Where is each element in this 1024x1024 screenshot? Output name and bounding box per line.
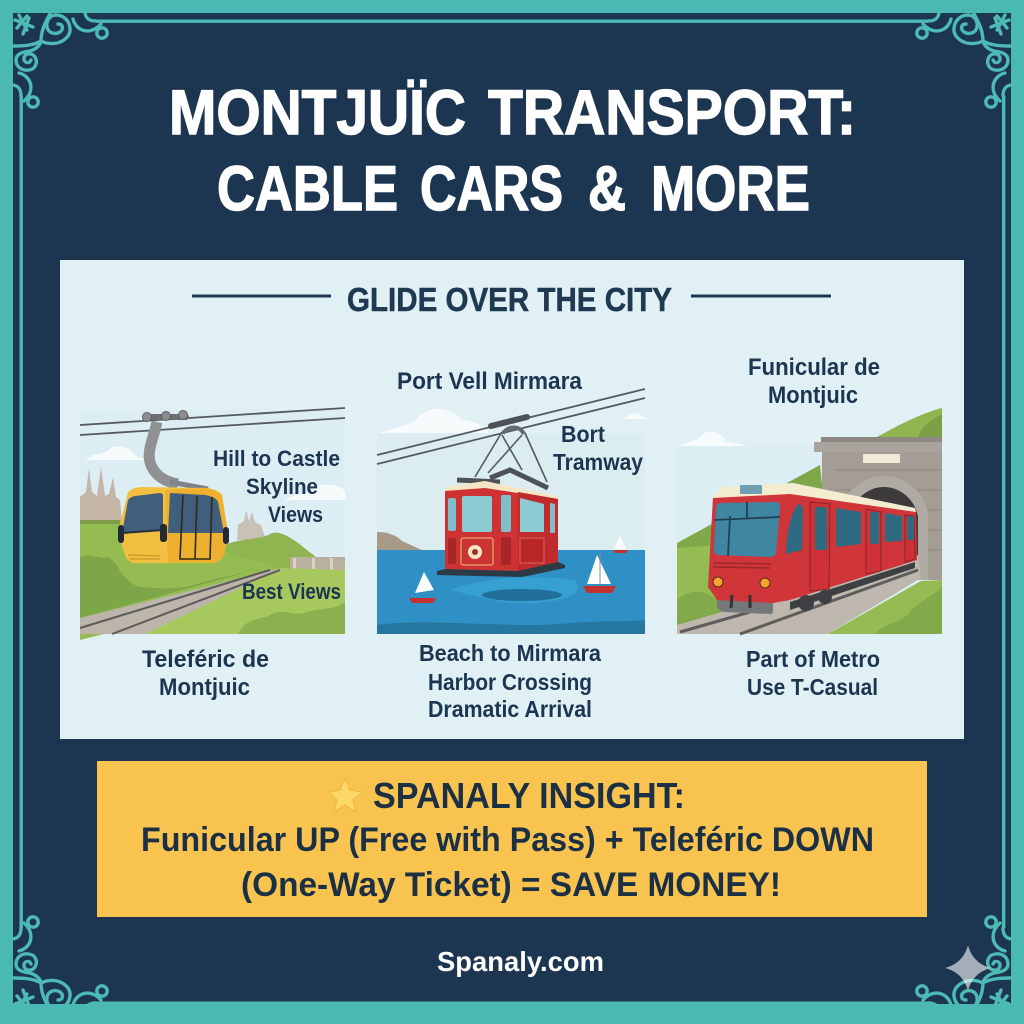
caption: Part of Metro: Use T-Casual <box>747 674 878 700</box>
caption: Teleféric de Montjuic <box>142 646 269 701</box>
image labels <box>213 446 341 604</box>
caption: Beach to Mirmara: Harbor Crossing <box>428 669 592 695</box>
image labels <box>553 421 643 475</box>
icon: star <box>329 778 362 812</box>
callout text: (One-Way Ticket) = SAVE MONEY! <box>241 866 781 904</box>
image labels: Skyline <box>246 474 318 499</box>
image labels: Tramway <box>553 449 643 475</box>
caption: Beach to Mirmara <box>419 640 601 722</box>
caption: Teleféric de Montjuic: Montjuic <box>159 674 250 701</box>
title: CABLE <box>217 154 398 224</box>
title: MORE <box>651 154 810 224</box>
caption: Beach to Mirmara: Dramatic Arrival <box>428 696 592 722</box>
footer: website: Spanaly.com <box>437 946 604 977</box>
image labels: Views <box>268 502 323 527</box>
caption: Funicular de Montjuic <box>748 354 880 409</box>
caption: Part of Metro: Part of Metro <box>746 646 880 672</box>
panel: glide over the city <box>60 260 964 739</box>
callout: Spanaly insight <box>97 761 927 917</box>
caption: Port Vell Mirmara: Port Vell Mirmara <box>397 368 583 395</box>
panel heading <box>192 281 831 318</box>
image labels: Best Views <box>242 579 341 604</box>
title: & <box>588 154 626 224</box>
callout text: SPANALY INSIGHT: <box>373 775 685 816</box>
illustration: red tramway over harbor <box>377 389 646 634</box>
icon: sparkle <box>945 945 991 991</box>
title: CARS <box>420 154 563 224</box>
callout text <box>141 775 874 904</box>
caption: Beach to Mirmara: Beach to Mirmara <box>419 640 601 666</box>
caption: Part of Metro <box>746 646 880 700</box>
title: TRANSPORT: <box>488 78 856 148</box>
caption: Funicular de Montjuic: Funicular de <box>748 354 880 381</box>
title: MONTJUÏC <box>169 78 466 148</box>
caption: Funicular de Montjuic: Montjuic <box>768 382 858 409</box>
callout text: Funicular UP (Free with Pass) + Teleféric DOWN <box>141 821 874 859</box>
illustration: red funicular leaving tunnel <box>677 408 942 634</box>
image labels: Bort <box>561 421 605 447</box>
panel heading: GLIDE OVER THE CITY <box>347 281 672 318</box>
illustration: yellow cable car over hills <box>80 408 345 640</box>
image labels: Hill to Castle <box>213 446 340 471</box>
title <box>169 78 856 224</box>
caption: Teleféric de Montjuic: Teleféric de <box>142 646 269 673</box>
